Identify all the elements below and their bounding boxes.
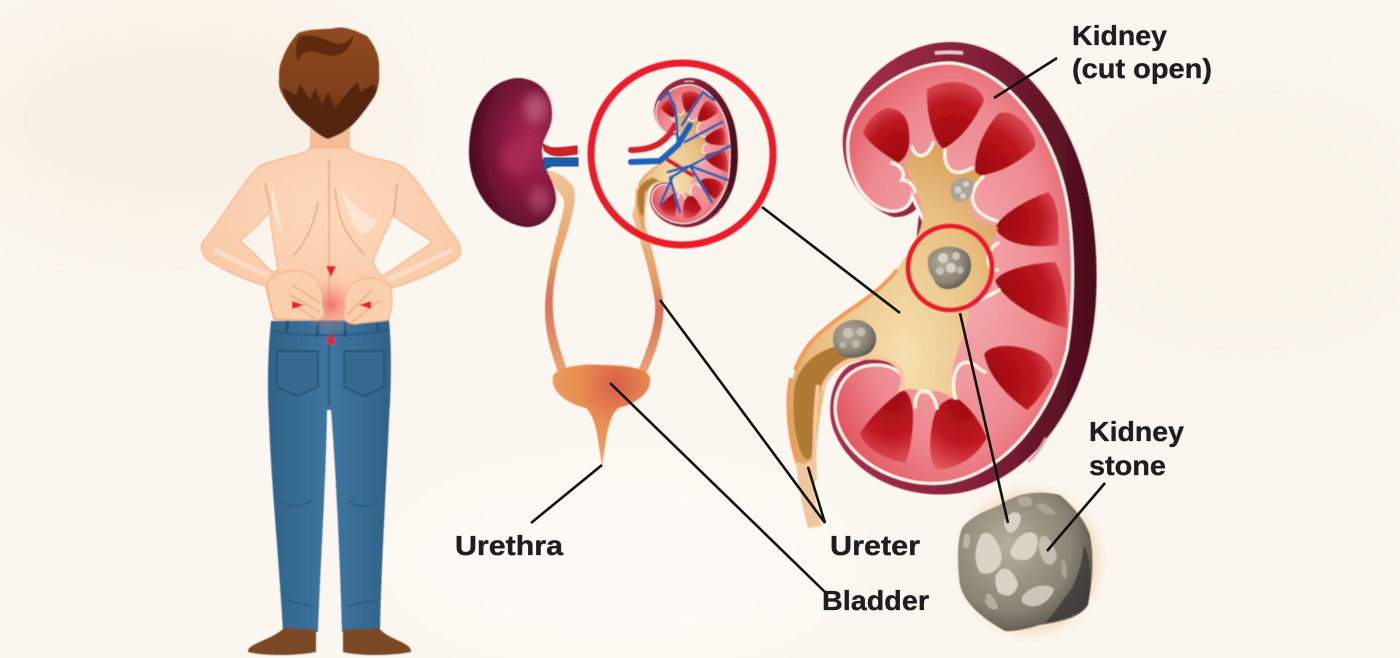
small stone bbox=[950, 178, 973, 202]
hair bbox=[279, 27, 379, 139]
line: urethra bbox=[531, 465, 602, 523]
stone in circle bbox=[928, 246, 971, 289]
red highlight circle small kidney bbox=[591, 63, 773, 245]
hands bbox=[267, 271, 392, 324]
torso and arms bbox=[201, 148, 461, 320]
cut kidney small bbox=[636, 78, 738, 232]
line: stone in kidney to enlarged stone bbox=[960, 313, 1008, 523]
bladder bbox=[553, 365, 650, 466]
urinary system bbox=[469, 63, 773, 466]
pain arrows bbox=[292, 266, 371, 344]
large cut-open kidney bbox=[788, 42, 1097, 528]
line: zoom to kidney bbox=[762, 207, 900, 313]
red highlight circle stone bbox=[908, 226, 992, 310]
figure: man holding lower back bbox=[201, 27, 461, 655]
dark kidney bbox=[469, 78, 556, 227]
left ureter bbox=[544, 170, 575, 378]
label: Urethra: Urethra bbox=[455, 530, 563, 561]
label: Kidney stone: Kidney bbox=[1089, 416, 1184, 447]
right ureter bbox=[632, 200, 664, 378]
ureter tail bbox=[796, 458, 822, 528]
line: kidney stone label bbox=[1047, 483, 1105, 551]
line: kidney bbox=[994, 58, 1057, 98]
label: Kidney (cut open): (cut open) bbox=[1072, 53, 1212, 84]
shoes bbox=[248, 628, 411, 655]
neck bbox=[290, 125, 372, 158]
jeans bbox=[268, 320, 391, 632]
stone halo bbox=[960, 490, 1100, 634]
label: Kidney (cut open) bbox=[1072, 20, 1212, 84]
left renal vessels bbox=[543, 144, 578, 170]
stone in ureter neck bbox=[833, 320, 876, 358]
renal vessels small bbox=[631, 92, 730, 212]
label: Kidney stone bbox=[1089, 416, 1184, 481]
label: Kidney stone: stone bbox=[1089, 450, 1166, 481]
line: bladder bbox=[610, 383, 825, 592]
label: Ureter: Ureter bbox=[830, 530, 920, 561]
stone body bbox=[958, 493, 1092, 631]
label: Kidney (cut open): Kidney bbox=[1072, 20, 1167, 51]
pain glow bbox=[301, 275, 361, 335]
line: ureter bbox=[660, 300, 825, 523]
kidney stone enlarged bbox=[958, 490, 1100, 634]
label: Bladder: Bladder bbox=[822, 585, 929, 616]
stone highlights bbox=[963, 496, 1067, 610]
leader lines bbox=[531, 58, 1105, 592]
